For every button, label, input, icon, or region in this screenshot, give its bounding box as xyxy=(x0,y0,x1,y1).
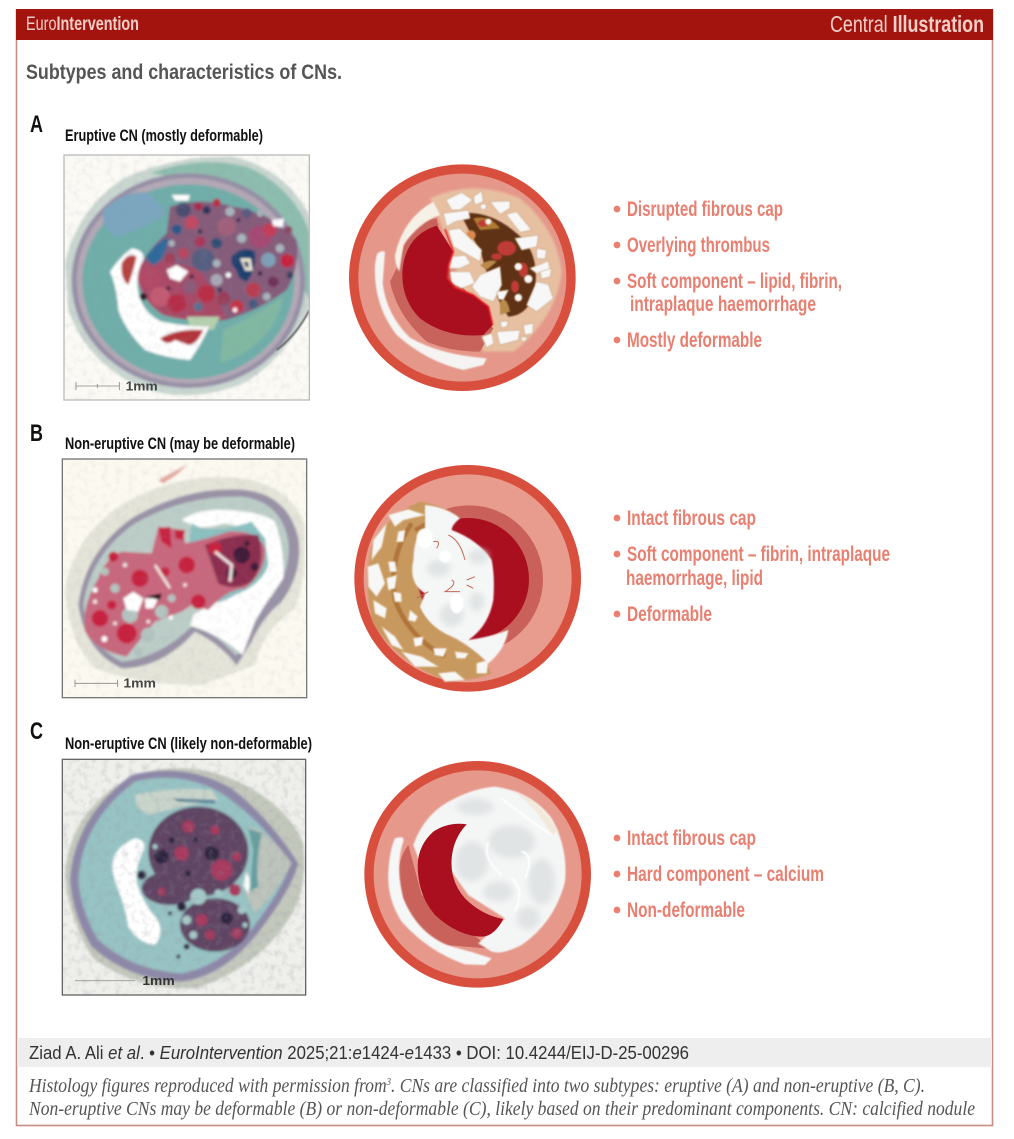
citation text: Ziad A. Ali et al. • EuroIntervention 2025;21:e1424-e1433 • DOI: 10.4244/EIJ-D-25-00296 xyxy=(29,1043,689,1063)
diagram C xyxy=(364,761,591,988)
calcification fragments B xyxy=(368,509,488,682)
bullet list B: Soft component – fibrin, intraplaque xyxy=(627,543,890,566)
panel letter B: B xyxy=(30,420,43,447)
citation band xyxy=(17,1038,992,1067)
caption: 3 xyxy=(386,1077,391,1088)
scale bar A xyxy=(76,382,119,390)
scale bar C xyxy=(75,980,135,982)
bullet list B xyxy=(614,507,890,626)
diagram A xyxy=(349,164,576,391)
panel C xyxy=(30,718,824,995)
histology A xyxy=(64,155,310,400)
panel B xyxy=(30,420,890,698)
journal name: EuroIntervention xyxy=(26,14,139,35)
scale bar B xyxy=(75,680,118,687)
illustration tag: Central Illustration xyxy=(830,11,984,37)
caption xyxy=(28,1075,975,1120)
caption: Histology figures reproduced with permission from xyxy=(29,1075,437,1097)
bullet list A: Overlying thrombus xyxy=(627,234,770,257)
bullet list C: Intact fibrous cap xyxy=(627,827,756,850)
diagram B xyxy=(354,465,581,692)
bullet list B: Deformable xyxy=(627,603,712,626)
heading C: Non-eruptive CN (likely non-deformable) xyxy=(65,734,312,753)
bullet list C: Hard component – calcium xyxy=(627,863,824,886)
bullet list A: Soft component – lipid, fibrin, xyxy=(627,270,842,293)
bullet list C xyxy=(614,827,824,922)
scale label C: 1mm xyxy=(142,973,175,988)
panel letter C: C xyxy=(30,718,43,745)
scale label A: 1mm xyxy=(126,379,158,394)
scale label B: 1mm xyxy=(123,675,156,690)
bullet list A xyxy=(614,198,842,352)
caption: . CNs are classified into two subtypes: eruptive (A) and non-eruptive (B, C). xyxy=(391,1075,925,1097)
bullet list C: Non-deformable xyxy=(627,899,745,922)
bullet list B: haemorrhage, lipid xyxy=(626,567,763,590)
heading A: Eruptive CN (mostly deformable) xyxy=(65,126,263,145)
histology C xyxy=(62,759,306,995)
bullet list A: Disrupted fibrous cap xyxy=(627,198,783,221)
header bar xyxy=(16,9,993,40)
bullet list B: Intact fibrous cap xyxy=(627,507,756,530)
panel letter A: A xyxy=(30,111,43,138)
histology B xyxy=(62,459,307,698)
title: Subtypes and characteristics of CNs. xyxy=(26,61,342,84)
panel A xyxy=(30,111,842,400)
bullet list A: intraplaque haemorrhage xyxy=(630,293,816,316)
bullet list A: Mostly deformable xyxy=(627,329,762,352)
calcification fragments A xyxy=(443,191,553,348)
heading B: Non-eruptive CN (may be deformable) xyxy=(65,434,295,453)
